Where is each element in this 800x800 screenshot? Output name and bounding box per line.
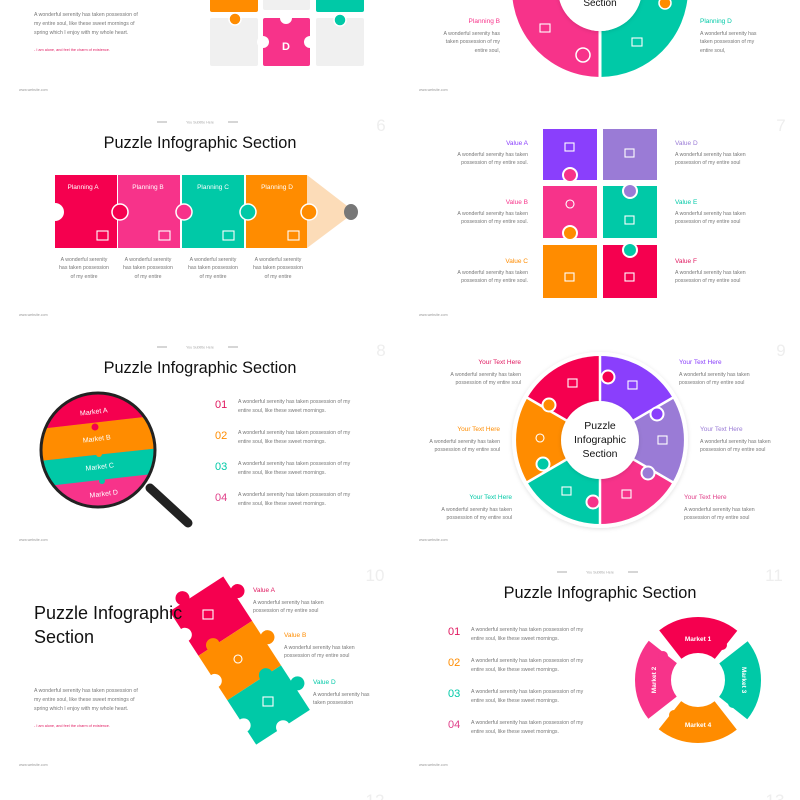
numbered list: entire soul, like these sweet mornings. bbox=[471, 698, 559, 704]
ring chart: Market 3 bbox=[740, 667, 747, 694]
text: Planning B: entire soul, bbox=[475, 48, 500, 54]
numbered list: A wonderful serenity has taken possession of my bbox=[471, 627, 584, 633]
puzzle grid bbox=[210, 0, 364, 66]
value labels: Value A bbox=[253, 587, 276, 594]
numbered list: 01 bbox=[215, 399, 227, 411]
numbered list: A wonderful serenity has taken possession of my bbox=[238, 430, 351, 436]
value labels left: A wonderful serenity has taken bbox=[457, 211, 528, 217]
heading bbox=[104, 341, 386, 377]
value labels left bbox=[457, 140, 529, 284]
labels right: possession of my entire soul bbox=[684, 515, 749, 521]
value labels: A wonderful serenity has taken bbox=[284, 645, 355, 651]
heading bbox=[504, 566, 783, 602]
value labels right: Value D bbox=[675, 140, 698, 147]
panel: slide 8 magnifier: www.website.com bbox=[19, 538, 48, 542]
numbered list: 01 bbox=[448, 626, 460, 638]
magnifier chart: Market D bbox=[89, 489, 118, 500]
heading: You Subtitle Here bbox=[186, 120, 214, 124]
pencil chart: Planning B bbox=[132, 184, 164, 191]
labels left: possession of my entire soul bbox=[456, 380, 521, 386]
value labels right: A wonderful serenity has taken bbox=[675, 270, 746, 276]
text: Planning D: entire soul, bbox=[700, 48, 725, 54]
descriptions: has taken possession bbox=[253, 265, 303, 271]
ring chart bbox=[635, 617, 761, 743]
page numbers partial bottom bbox=[366, 791, 784, 800]
value labels right: possession of my entire soul bbox=[675, 219, 740, 225]
panel: slide 5 partial (top-left): www.website.com bbox=[19, 88, 48, 92]
magnifier chart: Market B bbox=[82, 434, 111, 445]
text block bbox=[34, 688, 138, 728]
labels right: Your Text Here bbox=[679, 359, 722, 366]
descriptions: A wonderful serenity bbox=[61, 257, 108, 263]
pencil chart: Planning A bbox=[67, 184, 99, 191]
text: Planning D: A wonderful serenity has bbox=[700, 31, 757, 37]
numbered list bbox=[215, 399, 351, 507]
puzzle grid bbox=[543, 129, 657, 298]
descriptions: has taken possession bbox=[59, 265, 109, 271]
heading: Puzzle Infographic Section bbox=[104, 134, 296, 152]
ring chart: Section bbox=[582, 448, 618, 460]
panel: slide 9 circular puzzle bbox=[419, 341, 786, 542]
numbered list bbox=[448, 626, 584, 735]
heading: You Subtitle Here bbox=[586, 570, 614, 574]
text: Planning B bbox=[443, 18, 500, 54]
rotated puzzle chain bbox=[158, 561, 323, 754]
numbered list: 04 bbox=[448, 719, 460, 731]
text: Planning B: A wonderful serenity has bbox=[443, 31, 500, 37]
value labels: A wonderful serenity has taken bbox=[253, 600, 324, 606]
labels right: possession of my entire soul bbox=[679, 380, 744, 386]
labels left: A wonderful serenity has taken bbox=[429, 439, 500, 445]
panel: slide 7 value grid: www.website.com bbox=[419, 313, 448, 317]
labels left: A wonderful serenity has taken bbox=[450, 372, 521, 378]
panel: slide 7 value grid bbox=[419, 116, 786, 317]
text: Planning B: Planning B bbox=[469, 18, 500, 25]
ring chart halves bbox=[512, 0, 688, 80]
text: Planning B: taken possession of my bbox=[446, 39, 500, 45]
text: Planning D bbox=[700, 18, 757, 54]
numbered list: 03 bbox=[448, 688, 460, 700]
value labels bbox=[253, 587, 370, 706]
text block: A wonderful serenity has taken possession of bbox=[34, 688, 138, 694]
value labels right: A wonderful serenity has taken bbox=[675, 211, 746, 217]
value labels right: Value E bbox=[675, 199, 698, 206]
heading bbox=[104, 116, 386, 152]
numbered list: entire soul, like these sweet mornings. bbox=[238, 439, 326, 445]
value labels right: possession of my entire soul bbox=[675, 160, 740, 166]
heading: You Subtitle Here bbox=[186, 346, 214, 350]
pencil chart bbox=[46, 175, 358, 248]
value labels left: A wonderful serenity has taken bbox=[457, 270, 528, 276]
labels left: A wonderful serenity has taken bbox=[441, 507, 512, 513]
labels right: Your Text Here bbox=[700, 426, 743, 433]
ring chart: Infographic bbox=[574, 434, 626, 446]
ring chart: Market 4 bbox=[685, 722, 712, 729]
numbered list: A wonderful serenity has taken possession of my bbox=[471, 689, 584, 695]
title bbox=[34, 603, 182, 647]
labels right: A wonderful serenity has taken bbox=[679, 372, 750, 378]
panel: slide 11 market ring bbox=[419, 566, 783, 767]
value labels left: possession of my entire soul. bbox=[461, 278, 528, 284]
value labels left: possession of my entire soul. bbox=[461, 219, 528, 225]
value labels left: A wonderful serenity has taken bbox=[457, 152, 528, 158]
title: Puzzle Infographic bbox=[34, 603, 182, 623]
value labels: Value D bbox=[313, 679, 336, 686]
numbered list: 03 bbox=[215, 461, 227, 473]
labels left: possession of my entire soul bbox=[435, 447, 500, 453]
descriptions: has taken possession bbox=[123, 265, 173, 271]
value labels: taken possession bbox=[313, 700, 353, 706]
text block: intro bbox=[34, 12, 138, 52]
descriptions bbox=[59, 257, 303, 280]
panel: slide 7 value grid: 7 bbox=[776, 116, 786, 135]
ring chart bbox=[512, 352, 688, 528]
panel: slide 6 pencil puzzle: www.website.com bbox=[19, 313, 48, 317]
panel: slide 5 partial (top-left) bbox=[19, 0, 364, 92]
numbered list: A wonderful serenity has taken possession of my bbox=[238, 492, 351, 498]
value labels: possession of my entire soul bbox=[253, 608, 318, 614]
text block: intro: my entire soul, like these sweet mornings of bbox=[34, 21, 135, 27]
labels right bbox=[679, 359, 771, 521]
numbered list: entire soul, like these sweet mornings. bbox=[238, 470, 326, 476]
panel: slide 11 market ring: www.website.com bbox=[419, 763, 448, 767]
panel: slide partial (top-right ring) bbox=[419, 0, 757, 92]
numbered list: 02 bbox=[448, 657, 460, 669]
numbered list: entire soul, like these sweet mornings. bbox=[238, 501, 326, 507]
value labels right bbox=[675, 140, 746, 284]
text: Planning D: taken possession of my bbox=[700, 39, 755, 45]
descriptions: of my entire bbox=[134, 274, 162, 280]
descriptions: has taken possession bbox=[188, 265, 238, 271]
panel: slide 8 magnifier bbox=[19, 341, 386, 542]
panel: slide 10 diagonal puzzle: 10 bbox=[366, 566, 384, 585]
descriptions: A wonderful serenity bbox=[125, 257, 172, 263]
value labels right: A wonderful serenity has taken bbox=[675, 152, 746, 158]
value labels left: possession of my entire soul. bbox=[461, 160, 528, 166]
text block: intro: - I am alone, and feel the charm of existence. bbox=[34, 48, 110, 52]
panel: slide 6 pencil puzzle bbox=[19, 116, 386, 317]
descriptions: A wonderful serenity bbox=[255, 257, 302, 263]
text block: intro: A wonderful serenity has taken possession of bbox=[34, 12, 138, 18]
numbered list: 02 bbox=[215, 430, 227, 442]
text block: - I am alone, and feel the charm of existence. bbox=[34, 724, 110, 728]
title: Section bbox=[34, 627, 94, 647]
labels left: Your Text Here bbox=[457, 426, 500, 433]
text block: my entire soul, like these sweet mornings of bbox=[34, 697, 135, 703]
labels left: Your Text Here bbox=[478, 359, 521, 366]
text block: intro: spring which I enjoy with my whole heart. bbox=[34, 30, 128, 36]
ring chart: Puzzle bbox=[584, 420, 616, 432]
ring chart: Market 1 bbox=[685, 636, 712, 643]
value labels: possession of my entire soul bbox=[284, 653, 349, 659]
labels right: A wonderful serenity has taken bbox=[684, 507, 755, 513]
magnifier chart bbox=[30, 380, 188, 523]
value labels left: Value A bbox=[506, 140, 529, 147]
heading: 8 bbox=[376, 341, 386, 360]
descriptions: of my entire bbox=[264, 274, 292, 280]
heading: 6 bbox=[376, 116, 386, 135]
magnifier chart: Market C bbox=[85, 462, 114, 473]
panel: slide partial (top-right ring): www.website.com bbox=[419, 88, 448, 92]
heading: Puzzle Infographic Section bbox=[104, 359, 296, 377]
panel: slide 10 diagonal puzzle: www.website.com bbox=[19, 763, 48, 767]
ring chart: Market 2 bbox=[651, 666, 658, 693]
panel: slide 9 circular puzzle: 9 bbox=[776, 341, 786, 360]
text block: spring which I enjoy with my whole heart. bbox=[34, 706, 128, 712]
labels left: Your Text Here bbox=[469, 494, 512, 501]
descriptions: of my entire bbox=[199, 274, 227, 280]
labels right: A wonderful serenity has taken bbox=[700, 439, 771, 445]
numbered list: entire soul, like these sweet mornings. bbox=[471, 729, 559, 735]
puzzle grid: D bbox=[282, 41, 290, 53]
pencil chart: Planning C bbox=[197, 184, 229, 191]
heading: 11 bbox=[765, 566, 783, 585]
numbered list: entire soul, like these sweet mornings. bbox=[238, 408, 326, 414]
numbered list: A wonderful serenity has taken possession of my bbox=[238, 399, 351, 405]
labels left bbox=[429, 359, 521, 521]
panel: slide 10 diagonal puzzle bbox=[19, 561, 384, 767]
value labels right: Value F bbox=[675, 258, 697, 265]
labels right: Your Text Here bbox=[684, 494, 727, 501]
numbered list: entire soul, like these sweet mornings. bbox=[471, 636, 559, 642]
labels right: possession of my entire soul bbox=[700, 447, 765, 453]
heading: Puzzle Infographic Section bbox=[504, 584, 696, 602]
icons on chain bbox=[203, 610, 273, 706]
descriptions: A wonderful serenity bbox=[190, 257, 237, 263]
value labels left: Value B bbox=[506, 199, 528, 206]
panel: slide 9 circular puzzle: www.website.com bbox=[419, 538, 448, 542]
numbered list: A wonderful serenity has taken possession of my bbox=[238, 461, 351, 467]
value labels: Value B bbox=[284, 632, 306, 639]
value labels right: possession of my entire soul bbox=[675, 278, 740, 284]
numbered list: A wonderful serenity has taken possession of my bbox=[471, 720, 584, 726]
numbered list: entire soul, like these sweet mornings. bbox=[471, 667, 559, 673]
value labels: A wonderful serenity has bbox=[313, 692, 370, 698]
text: Planning D: Planning D bbox=[700, 18, 732, 25]
magnifier chart: Market A bbox=[80, 407, 108, 418]
descriptions: of my entire bbox=[70, 274, 98, 280]
labels left: possession of my entire soul bbox=[447, 515, 512, 521]
numbered list: A wonderful serenity has taken possession of my bbox=[471, 658, 584, 664]
numbered list: 04 bbox=[215, 492, 227, 504]
value labels left: Value C bbox=[505, 258, 528, 265]
pencil chart: Planning D bbox=[261, 184, 293, 191]
